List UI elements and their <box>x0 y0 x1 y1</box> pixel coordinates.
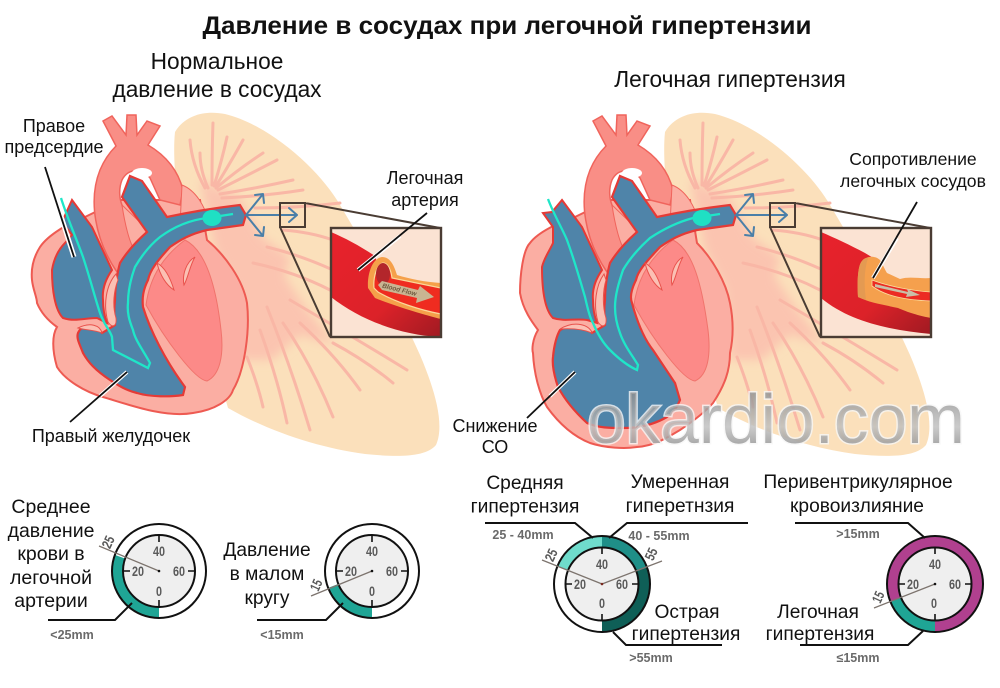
label: right atrium: Правое <box>23 116 85 136</box>
gauge: pulmonary circulation: 40 <box>366 543 378 559</box>
gauge: hemorrhage vs pulmonary hypertension: >15mm <box>836 527 880 541</box>
catheter balloon <box>692 210 712 226</box>
label: pulmonary artery: артерия <box>391 190 459 210</box>
lung <box>664 113 929 456</box>
gauge: hemorrhage vs pulmonary hypertension: 60 <box>949 576 961 592</box>
pointer: right ventricle <box>70 372 127 422</box>
aorta <box>94 115 210 272</box>
gauge: mean pressure <box>48 524 206 642</box>
aorta <box>584 115 700 272</box>
gauge: pulmonary circulation: 20 <box>345 563 357 579</box>
gauge: pulmonary circulation: 15 <box>306 577 326 593</box>
panel: hypertension heart and lung <box>452 113 986 457</box>
label: mild hypertension: Средняя <box>486 473 564 494</box>
left ventricle <box>146 240 222 381</box>
label: acute hypertension: Острая <box>654 602 720 623</box>
label: right ventricle: Правый желудочек <box>32 426 190 446</box>
label: right atrium: предсердие <box>4 137 104 157</box>
label: reduced cardiac output: Снижение <box>452 416 538 436</box>
label: periventricular hemorrhage: кровоизлияние <box>790 496 924 517</box>
gauge: mean pressure: 40 <box>153 543 165 559</box>
label: vascular resistance: Сопротивление <box>849 149 977 169</box>
valve flaps <box>560 257 683 333</box>
gauge: hypertension grades: 40 <box>596 556 608 572</box>
pointer: pulmonary artery <box>358 213 427 270</box>
right atrium <box>52 200 112 323</box>
watermark: okardio.com <box>587 380 965 458</box>
gauge: hypertension grades: 55 <box>641 545 661 563</box>
label: pulmonary circulation pressure: кругу <box>244 588 290 609</box>
label: pulmonary hypertension gauge: гипертензия <box>766 624 874 645</box>
inset: healthy artery <box>331 228 441 337</box>
heading: normal pressure: давление в сосудах <box>112 76 322 102</box>
label: mean pulmonary artery pressure: Среднее <box>11 496 91 518</box>
pointer: reduced cardiac output <box>527 372 575 418</box>
inset: narrowed artery <box>821 228 931 337</box>
label: moderate hypertension: Умеренная <box>631 472 729 493</box>
heading: pulmonary hypertension: Легочная гипертензия <box>614 66 846 92</box>
gauge: hypertension grades: 25 <box>541 546 561 564</box>
flow arrows <box>736 194 787 236</box>
catheter balloon <box>202 210 222 226</box>
gauge: hemorrhage vs pulmonary hypertension: ≤15mm <box>836 651 880 665</box>
heart outer wall <box>32 200 248 414</box>
lung <box>174 113 439 456</box>
label: pulmonary circulation pressure: Давление <box>223 540 311 561</box>
gauge: pulmonary circulation: 0 <box>369 583 375 599</box>
gauge: mean pressure: 60 <box>173 563 185 579</box>
label: pulmonary circulation pressure: в малом <box>230 564 304 585</box>
gauge: mean pressure: 0 <box>156 583 162 599</box>
right ventricle and pulmonary artery <box>77 176 246 396</box>
label: mean pulmonary artery pressure: крови в <box>17 543 85 565</box>
label: mean pulmonary artery pressure: артерии <box>14 590 88 612</box>
label: pulmonary artery: Легочная <box>387 168 463 188</box>
inset: healthy artery: Blood Flow <box>381 283 418 298</box>
gauge: hypertension grades: 60 <box>616 576 628 592</box>
label: mean pulmonary artery pressure: давление <box>8 520 94 542</box>
zoom box and connectors <box>280 203 440 337</box>
right atrium <box>542 200 602 323</box>
gauge: hypertension grades: 20 <box>574 576 586 592</box>
left ventricle <box>634 240 709 381</box>
label: moderate hypertension: гиперетнзия <box>626 496 734 517</box>
gauge: hypertension grades: >55mm <box>629 651 673 665</box>
gauge: mean pressure: 25 <box>98 533 118 551</box>
pointer: right atrium <box>45 167 74 257</box>
label: reduced cardiac output: СО <box>482 437 508 457</box>
gauge: hypertension grades: 0 <box>599 595 605 611</box>
catheter <box>61 198 233 368</box>
label: periventricular hemorrhage: Перивентрикулярное <box>763 472 953 493</box>
zoom box and connectors <box>770 203 930 337</box>
gauge: hypertension grades: 40 - 55mm <box>628 529 690 543</box>
flow arrows <box>246 194 297 236</box>
gauge: hypertension grades <box>485 523 748 665</box>
heading: normal pressure: Нормальное <box>151 48 283 74</box>
gauge: pulmonary circulation: 60 <box>386 563 398 579</box>
gauge: mean pressure: 20 <box>132 563 144 579</box>
gauge: hemorrhage vs pulmonary hypertension: 15 <box>868 589 888 605</box>
gauge: hypertension grades: 25 - 40mm <box>492 528 554 542</box>
label: vascular resistance: легочных сосудов <box>840 171 986 191</box>
gauge: pulmonary circulation: <15mm <box>260 628 304 642</box>
gauge: pulmonary circulation <box>257 524 419 642</box>
panel: normal heart and lung <box>4 113 463 456</box>
label: pulmonary hypertension gauge: Легочная <box>777 602 859 623</box>
label: acute hypertension: гипертензия <box>632 624 740 645</box>
title: Давление в сосудах при легочной гипертензии <box>202 12 811 40</box>
enlarged right ventricle and pulmonary artery <box>553 176 736 428</box>
gauge: hemorrhage vs pulmonary hypertension: 0 <box>931 595 937 611</box>
label: mean pulmonary artery pressure: легочной <box>10 567 92 589</box>
gauge: hemorrhage vs pulmonary hypertension <box>795 523 983 665</box>
heart group <box>520 115 930 448</box>
gauge: mean pressure: <25mm <box>50 628 94 642</box>
label: mild hypertension: гипертензия <box>471 496 579 518</box>
valve flaps <box>78 257 195 333</box>
heart outer wall <box>520 200 733 448</box>
gauge: hemorrhage vs pulmonary hypertension: 20 <box>907 576 919 592</box>
catheter <box>548 199 720 370</box>
gauge: hemorrhage vs pulmonary hypertension: 40 <box>929 556 941 572</box>
pointer: vascular resistance <box>873 202 917 278</box>
